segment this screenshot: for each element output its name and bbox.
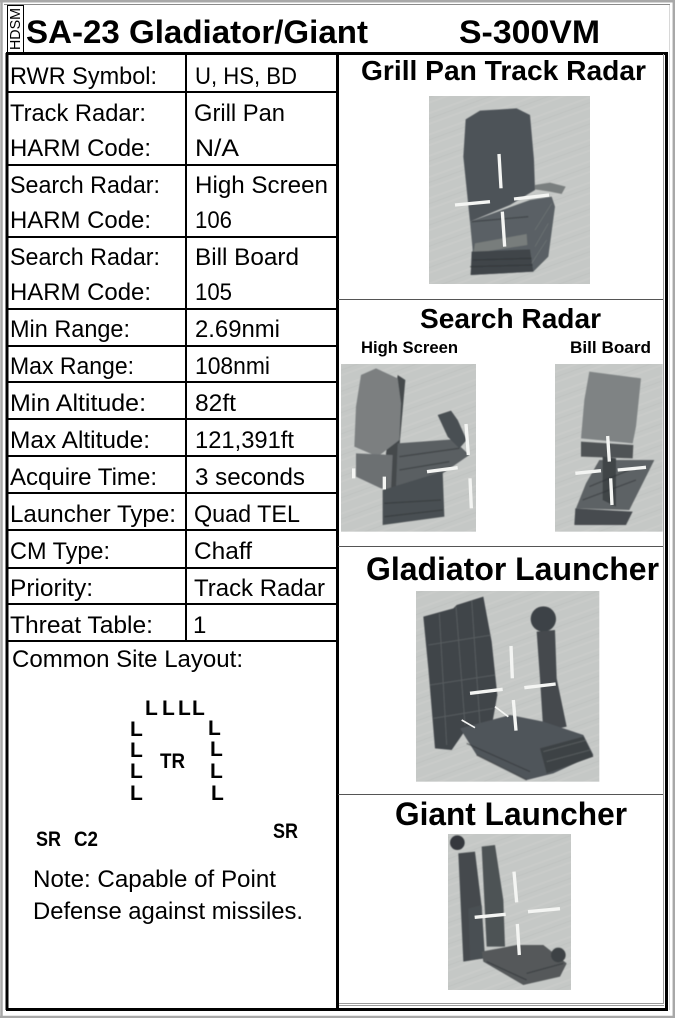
site diagram: L	[211, 782, 224, 805]
row: search radar high screen: Search Radar:	[10, 172, 160, 199]
note: Defense against missiles.	[33, 898, 303, 925]
site diagram: SR	[36, 828, 61, 851]
heading: Search Radar	[420, 303, 601, 334]
row: min altitude: Min Altitude:	[10, 390, 146, 417]
title: S-300VM	[459, 14, 600, 50]
HDSM tag: HDSM	[7, 8, 24, 50]
site diagram: L	[178, 697, 191, 720]
site diagram: L	[130, 718, 143, 741]
row: search radar high screen	[10, 172, 328, 199]
row: track radar: Grill Pan	[194, 100, 285, 127]
row: bill board HARM code	[10, 279, 232, 306]
row: CM type: CM Type:	[10, 538, 110, 565]
data table	[10, 63, 328, 639]
row: acquire time: Acquire Time:	[10, 464, 157, 491]
row: priority: Priority:	[10, 575, 93, 602]
site diagram: SR	[273, 820, 298, 843]
row: RWR symbol	[10, 63, 297, 90]
title: SA-23 Gladiator/Giant	[26, 14, 368, 50]
row: search radar bill board: Bill Board	[195, 244, 299, 271]
site diagram: L	[208, 717, 221, 740]
row: CM type: Chaff	[194, 538, 252, 565]
row: search radar bill board: Search Radar:	[10, 244, 160, 271]
row: min altitude	[10, 390, 236, 417]
row: RWR symbol: U, HS, BD	[195, 63, 297, 90]
row: CM type	[10, 538, 252, 565]
site diagram: L	[210, 760, 223, 783]
row: track HARM code: HARM Code:	[10, 135, 151, 162]
row: search radar bill board	[10, 244, 299, 271]
row: track HARM code: N/A	[195, 135, 239, 162]
row: track radar	[10, 100, 285, 127]
site diagram: L	[192, 697, 205, 720]
panel: gladiator launcher	[366, 551, 659, 782]
row: acquire time: 3 seconds	[195, 464, 305, 491]
heading: Gladiator Launcher	[366, 551, 659, 587]
row: min range: Min Range:	[10, 316, 130, 343]
row: search radar high screen: High Screen	[195, 172, 328, 199]
row: high screen HARM code	[10, 207, 232, 234]
row: min range	[10, 316, 280, 343]
row: acquire time	[10, 464, 305, 491]
site diagram	[36, 697, 298, 851]
site diagram: L	[162, 697, 175, 720]
photo: high screen radar	[341, 364, 476, 532]
photo: grill pan radar	[429, 96, 590, 284]
row: RWR symbol: RWR Symbol:	[10, 63, 157, 90]
site diagram: L	[130, 782, 143, 805]
row: launcher type: Launcher Type:	[10, 501, 176, 528]
row: track HARM code	[10, 135, 239, 162]
row: threat table: Threat Table:	[10, 612, 153, 639]
title	[26, 14, 600, 50]
row: launcher type	[10, 501, 300, 528]
row: priority	[10, 575, 325, 602]
photo: gladiator launcher	[416, 591, 599, 782]
row: launcher type: Quad TEL	[194, 501, 300, 528]
site diagram: L	[130, 760, 143, 783]
photo: bill board radar	[555, 364, 663, 532]
row: min range: 2.69nmi	[195, 316, 280, 343]
site diagram: L	[210, 738, 223, 761]
panel: search radar	[341, 303, 663, 532]
panel: common site layout	[12, 646, 303, 925]
site diagram: L	[145, 697, 158, 720]
heading: Grill Pan Track Radar	[361, 55, 646, 86]
row: high screen HARM code: 106	[195, 207, 232, 234]
row: max altitude: 121,391ft	[195, 427, 294, 454]
note	[33, 866, 303, 925]
row: threat table: 1	[193, 612, 206, 639]
row: high screen HARM code: HARM Code:	[10, 207, 151, 234]
label: bill board: Bill Board	[570, 338, 651, 357]
panel: giant launcher	[395, 796, 627, 990]
row: max range: Max Range:	[10, 353, 134, 380]
row: max range: 108nmi	[195, 353, 270, 380]
layout heading: Common Site Layout:	[12, 646, 243, 673]
row: max altitude	[10, 427, 294, 454]
row: priority: Track Radar	[194, 575, 325, 602]
row: track radar: Track Radar:	[10, 100, 146, 127]
row: min altitude: 82ft	[195, 390, 236, 417]
row: max range	[10, 353, 270, 380]
photo: giant launcher	[448, 834, 571, 990]
site diagram: TR	[160, 750, 185, 773]
row: bill board HARM code: HARM Code:	[10, 279, 151, 306]
heading: Giant Launcher	[395, 796, 627, 832]
site diagram: C2	[74, 828, 98, 851]
row: bill board HARM code: 105	[195, 279, 232, 306]
note: Note: Capable of Point	[33, 866, 276, 893]
row: max altitude: Max Altitude:	[10, 427, 150, 454]
panel: grill pan track radar	[361, 55, 646, 284]
site diagram: L	[130, 739, 143, 762]
label: high screen: High Screen	[361, 338, 458, 357]
